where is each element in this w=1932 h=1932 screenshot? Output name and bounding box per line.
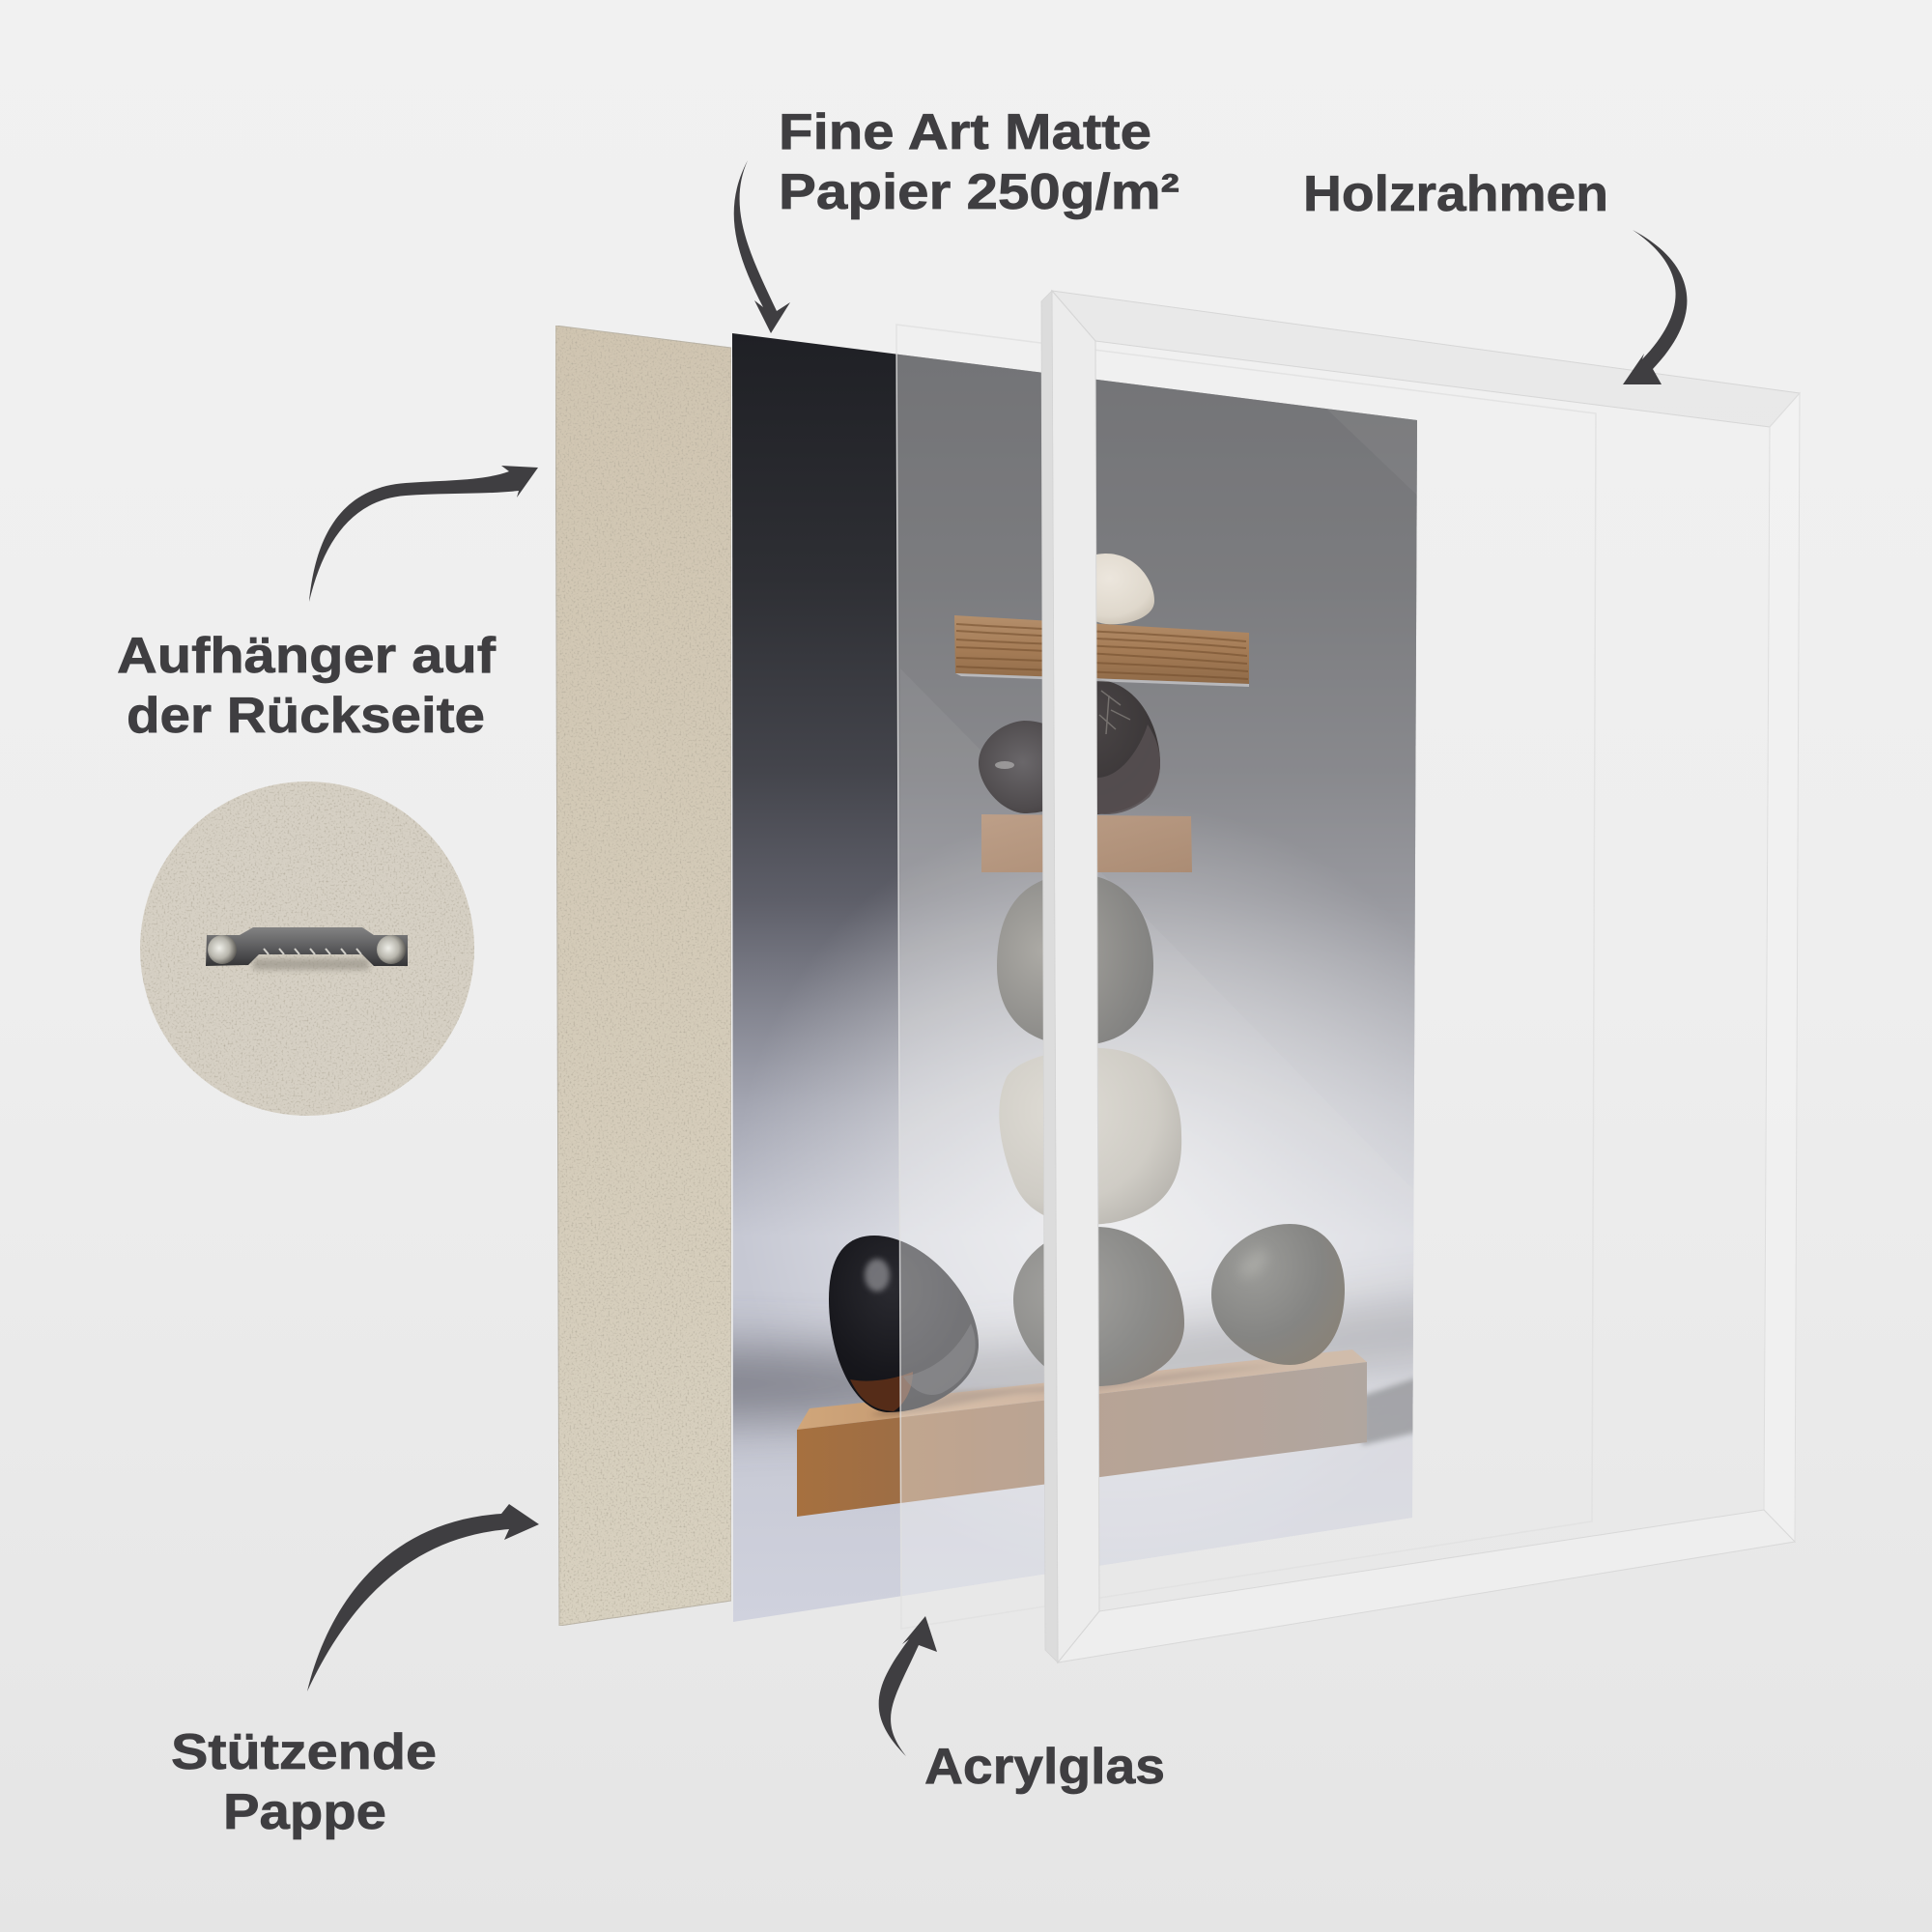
sawtooth hanger — [206, 927, 408, 966]
wooden base: top face — [797, 1350, 1367, 1430]
acrylic reflection upper — [1326, 406, 1430, 507]
arrow: fine art paper — [734, 160, 790, 333]
stone 5 — [1013, 1227, 1184, 1386]
panel: supporting cardboard — [555, 326, 731, 1626]
frame: top bar — [1052, 291, 1800, 427]
dark stone — [1097, 679, 1160, 814]
label: supporting cardboard: Pappe — [223, 1784, 386, 1840]
stone shadows on base — [873, 1368, 1244, 1417]
wooden base: front face — [797, 1362, 1367, 1517]
acrylic glass outline — [896, 325, 1596, 1629]
wood plank 2 — [981, 814, 1192, 872]
horizon shadow band — [676, 1299, 1468, 1420]
stone 1 — [1096, 554, 1154, 624]
stone 4 — [999, 1048, 1181, 1225]
backdrop light glow — [790, 852, 1414, 1356]
panel: fine art paper print — [732, 333, 1417, 1622]
label: acrylic glass: Acrylglas — [924, 1739, 1165, 1795]
label: hanger — [117, 628, 497, 744]
label: fine art paper: Fine Art Matte — [779, 104, 1151, 160]
acrylic glass sheet over print — [896, 354, 1417, 1596]
circle detail: hanger on cardboard back — [140, 781, 474, 1116]
arrow: acrylic glass — [879, 1616, 937, 1756]
stone 3 — [997, 874, 1153, 1045]
frame: left side edge — [1041, 291, 1058, 1662]
right stone — [1211, 1224, 1345, 1365]
arrow: hanger — [309, 466, 538, 602]
arrow: wooden frame — [1623, 230, 1687, 384]
print backdrop — [724, 328, 1425, 1628]
cardboard disc — [140, 781, 474, 1116]
label: supporting cardboard: Stützende — [171, 1724, 437, 1780]
black stone — [829, 1236, 979, 1412]
label: fine art paper — [779, 104, 1179, 220]
wood plank 1 — [954, 615, 1249, 687]
label: hanger: Aufhänger auf — [117, 628, 497, 684]
block shadow — [1362, 1377, 1420, 1445]
frame: right bar — [1764, 393, 1800, 1542]
label: fine art paper: Papier 250g/m² — [779, 164, 1179, 220]
acrylic reflection lower — [900, 668, 1507, 1642]
small dark stone — [979, 721, 1043, 813]
frame: left bar — [1052, 291, 1099, 1662]
label: supporting cardboard — [171, 1724, 437, 1840]
hanger shadow — [253, 958, 369, 970]
wooden frame — [1041, 291, 1800, 1662]
label: wooden frame: Holzrahmen — [1303, 166, 1608, 222]
arrow: cardboard — [307, 1504, 539, 1691]
frame: bottom bar — [1058, 1510, 1795, 1662]
label: hanger: der Rückseite — [127, 688, 485, 744]
